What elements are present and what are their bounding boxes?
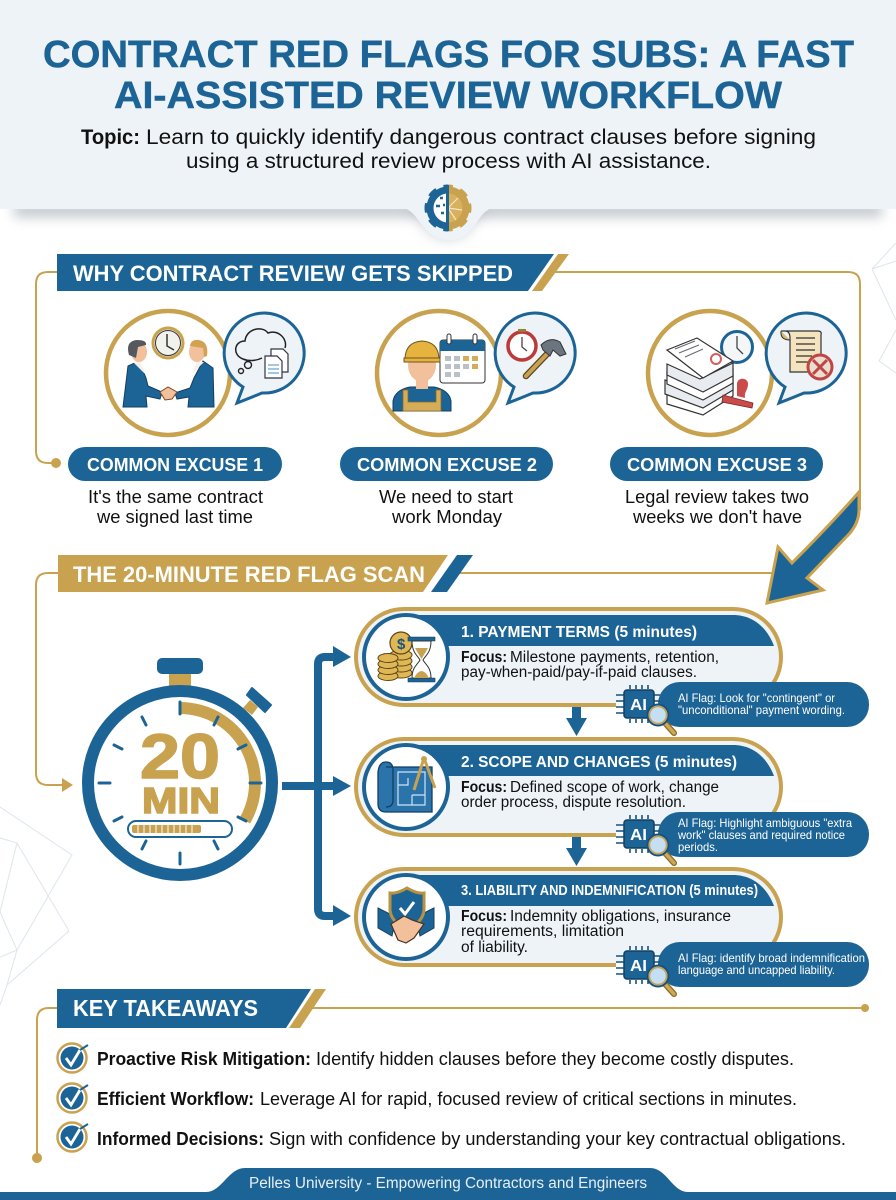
topic text: Learn to quickly identify dangerous contract clauses before signing (146, 126, 816, 149)
focus text: order process, dispute resolution. (461, 794, 686, 811)
takeaway 2 (58, 1084, 797, 1112)
icon: thought bubble (224, 313, 304, 403)
AI flag callout: periods. (678, 840, 718, 854)
caption: It's the same contract (88, 487, 263, 507)
footer (0, 1168, 896, 1200)
caption: work Monday (391, 507, 502, 527)
pill label (68, 447, 282, 481)
timer text: 20 (140, 722, 220, 792)
icon: check (58, 1084, 88, 1112)
topic text (81, 126, 816, 173)
icon: 20 minute stopwatch (88, 658, 272, 875)
focus text (461, 908, 731, 956)
background geometric line pattern (0, 243, 896, 1005)
icon: blueprint and compass (378, 756, 435, 812)
connector: gold frame around why section (36, 272, 860, 510)
panel: step 2 scope and changes (356, 739, 869, 863)
arrow: step 2 to step 3 (566, 837, 587, 866)
connector dots (32, 1004, 869, 1163)
focus text (461, 649, 719, 681)
step heading: 2. SCOPE AND CHANGES (5 minutes) (461, 754, 737, 771)
AI flag callout: AI Flag: Look for "contingent" or (678, 691, 835, 705)
caption (625, 487, 809, 527)
takeaway 1 (58, 1044, 794, 1072)
topic text: Topic: (81, 126, 140, 149)
focus text: Defined scope of work, change (510, 779, 719, 796)
arrows: branching connector to steps (282, 646, 351, 926)
pill label (610, 447, 823, 481)
pill label: COMMON EXCUSE 2 (357, 455, 537, 475)
arrow: big blue arrow to scan section (767, 492, 859, 603)
pill label: COMMON EXCUSE 1 (87, 455, 263, 475)
caption (88, 487, 263, 527)
takeaway 3: Informed Decisions: (97, 1129, 264, 1149)
focus text: Milestone payments, retention, (510, 649, 719, 666)
takeaway 2: Leverage AI for rapid, focused review of critical sections in minutes. (260, 1089, 797, 1109)
connector dot (51, 458, 61, 468)
arrow: step 1 to step 2 (566, 707, 587, 736)
icon: paper stack, clock and stamp (648, 311, 772, 435)
title: AI-ASSISTED REVIEW WORKFLOW (114, 75, 782, 117)
icon: check (58, 1044, 88, 1072)
icon: coins and hourglass (378, 632, 435, 682)
takeaway 3 (58, 1122, 846, 1152)
connector: gold line to timer (36, 573, 778, 785)
AI flag callout: AI Flag: Highlight ambiguous "extra (678, 816, 852, 830)
icon: shield and handshake (378, 888, 434, 943)
section banner: key takeaways: KEY TAKEAWAYS (73, 995, 258, 1021)
caption (379, 487, 513, 527)
section banner: 20-minute red flag scan (58, 555, 473, 592)
takeaway 1: Proactive Risk Mitigation: (97, 1049, 311, 1069)
header panel (0, 0, 896, 240)
section banner: key takeaways (57, 989, 326, 1028)
AI flag callout (616, 682, 869, 733)
AI flag callout (616, 812, 869, 863)
progress bar (128, 821, 232, 837)
focus text: of liability. (461, 939, 528, 956)
AI flag callout: AI (630, 697, 647, 714)
step heading: 3. LIABILITY AND INDEMNIFICATION (5 minutes) (461, 882, 758, 899)
connector: key takeaways gold frame (37, 1008, 865, 1157)
topic text: using a structured review process with AI assistance. (186, 150, 711, 173)
takeaway 2: Efficient Workflow: (97, 1089, 254, 1109)
icon: rejected scroll bubble (766, 313, 846, 403)
AI flag callout (616, 942, 869, 994)
icon: coins and hourglass: $ (397, 636, 406, 653)
timer text (140, 722, 220, 821)
footer: Pelles University - Empowering Contractors and Engineers (249, 1175, 647, 1192)
AI flag callout: work" clauses and required notice (677, 828, 845, 842)
pill label: COMMON EXCUSE 3 (627, 455, 807, 475)
focus text: requirements, limitation (461, 923, 624, 940)
focus text: Focus: (461, 908, 507, 925)
panel: excuse 3 (610, 311, 846, 527)
pill label (340, 447, 553, 481)
panel: excuse 2 (340, 311, 575, 527)
icon: half gear half brain (427, 185, 469, 231)
timer text: MIN (142, 780, 220, 821)
takeaway 3: Sign with confidence by understanding your key contractual obligations. (269, 1129, 846, 1149)
focus text: Focus: (461, 649, 507, 666)
focus text: pay-when-paid/pay-if-paid clauses. (461, 664, 697, 681)
icon: handshake with clock (106, 311, 230, 435)
panel: step 3 liability and indemnification (356, 869, 869, 994)
title: CONTRACT RED FLAGS FOR SUBS: A FAST (43, 34, 854, 76)
panel: excuse 1 (68, 311, 304, 527)
caption: we signed last time (96, 507, 253, 527)
section banner: 20-minute red flag scan: THE 20-MINUTE RED FLAG SCAN (73, 562, 425, 587)
icon: stopwatch and hammer bubble (495, 313, 575, 403)
icon: check (58, 1122, 88, 1152)
takeaway 1: Identify hidden clauses before they become costly disputes. (316, 1049, 794, 1069)
caption: Legal review takes two (625, 487, 809, 507)
caption: weeks we don't have (632, 507, 802, 527)
focus text (461, 779, 719, 811)
focus text: Indemnity obligations, insurance (510, 908, 731, 925)
section banner: why contract review gets skipped: WHY CONTRACT REVIEW GETS SKIPPED (73, 261, 513, 286)
caption: We need to start (379, 487, 513, 507)
AI flag callout: "unconditional" payment wording. (678, 703, 845, 717)
title (43, 34, 854, 117)
icon: worker with calendar (377, 311, 501, 435)
step heading: 1. PAYMENT TERMS (5 minutes) (461, 624, 697, 641)
AI flag callout: AI Flag: identify broad indemnification (678, 951, 865, 965)
AI flag callout: AI (630, 827, 647, 844)
arrow: gold tip into timer (62, 778, 73, 792)
focus text: Focus: (461, 779, 507, 796)
panel: step 1 payment terms (356, 609, 869, 733)
AI flag callout: language and uncapped liability. (678, 963, 835, 977)
AI flag callout: AI (630, 958, 647, 975)
section banner: why contract review gets skipped (57, 254, 569, 291)
